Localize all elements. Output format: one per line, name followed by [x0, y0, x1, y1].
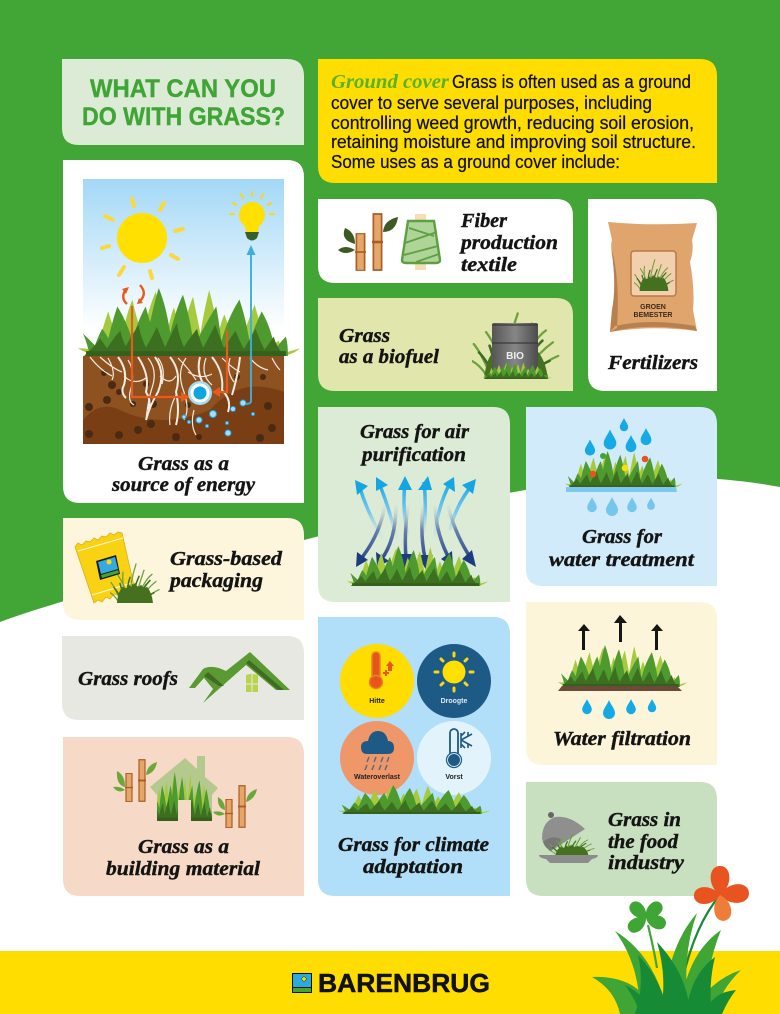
label: Grass: [339, 325, 390, 347]
particles: [590, 453, 648, 477]
icon: drought: [417, 644, 491, 718]
label: [338, 834, 489, 878]
icon: fertilizer bag: [608, 222, 697, 332]
label: building material: [106, 858, 260, 880]
icon: water drops above grass: [585, 418, 651, 456]
grass: [347, 546, 488, 586]
icon: house of grass with bamboo: [113, 756, 257, 828]
panel: title: [62, 59, 304, 145]
panel: grass as a biofuel: [318, 298, 573, 391]
label: Fertilizers: [607, 352, 698, 374]
text block: ground cover: Grass is often used as a ground: [452, 72, 691, 92]
icon: frost: Vorst: [445, 774, 463, 781]
panel: grass for air purification: [318, 407, 510, 602]
label: production: [459, 232, 558, 254]
grass tuft: [110, 564, 159, 603]
panel: grass roofs: [62, 636, 304, 720]
panel: fiber production textile: [318, 199, 573, 283]
icon: bamboo and thread spool: [338, 214, 440, 270]
icon: air arrows: [355, 476, 476, 570]
label: Grass as a: [138, 453, 229, 475]
icon: cloche with grass: [539, 812, 598, 863]
water: blue arrow to bulb: [182, 245, 256, 436]
text block: ground cover: Ground cover: [331, 71, 449, 93]
text block: ground cover: cover to serve several purposes, including: [331, 93, 652, 113]
icon: yellow pouch with grass: [75, 532, 135, 603]
grass: [338, 785, 490, 814]
grass: [78, 288, 300, 356]
label: Grass for air: [360, 421, 469, 443]
label: Grass for: [582, 526, 662, 548]
icon: heat: [340, 644, 414, 718]
icon: flooding: Wateroverlast: [354, 774, 401, 781]
label: source of energy: [111, 474, 255, 496]
label: purification: [360, 444, 466, 466]
plant: flower, clover and grass blades: [592, 866, 750, 1014]
text block: ground cover: [331, 71, 696, 172]
label: [111, 453, 255, 496]
label: [106, 836, 260, 880]
water drops: [582, 699, 656, 719]
filter band: [566, 487, 677, 492]
label: the food: [608, 831, 679, 853]
panel: grass for climate adaptation: [318, 617, 510, 896]
grass: [558, 645, 687, 687]
text block: ground cover: retaining moisture and improving soil structure.: [331, 132, 696, 152]
label: Grass roofs: [78, 668, 178, 690]
icon: light bulb: [230, 192, 274, 240]
label: industry: [608, 852, 684, 874]
sky: [83, 179, 284, 357]
label: water treatment: [549, 549, 696, 571]
label: as a biofuel: [339, 346, 439, 368]
text block: ground cover: controlling weed growth, reducing soil erosion,: [331, 113, 694, 133]
label: [459, 210, 558, 276]
panel: grass for water treatment: [526, 407, 717, 586]
text block: ground cover: Some uses as a ground cover include:: [331, 152, 620, 172]
icon: black arrows up: [578, 615, 663, 650]
icon: heat: Hitte: [369, 698, 385, 705]
icon: fertilizer bag: BEMESTER: [634, 312, 672, 319]
panel: grass as a building material: [63, 737, 304, 896]
label: adaptation: [363, 856, 463, 878]
filtered drops: [587, 497, 655, 516]
label: Water filtration: [553, 728, 691, 750]
icon: bio barrel in grass: [472, 313, 558, 379]
label: [339, 325, 439, 368]
label: [168, 548, 283, 592]
label: Grass as a: [138, 836, 229, 858]
roots: [90, 357, 280, 435]
icon: green roof house: [189, 652, 290, 703]
panel: grass as a source of energy: [63, 160, 304, 503]
label: Fiber: [460, 210, 507, 232]
icon: bio barrel in grass: BIO: [506, 351, 524, 362]
icon: frost: [417, 721, 491, 795]
blades: [592, 977, 655, 1014]
heading: DO WITH GRASS?: [82, 103, 285, 131]
panel: water filtration: [526, 602, 717, 765]
panel: grass in the food industry: [526, 782, 717, 896]
label: Grass in: [608, 809, 681, 831]
footer band: [0, 951, 780, 1014]
grass: [565, 451, 682, 488]
clover: [625, 898, 668, 936]
energy flow: orange arrows: [122, 285, 227, 402]
stems: [683, 895, 720, 978]
soil strip: [558, 686, 682, 691]
label: [549, 526, 696, 571]
panel: ground cover intro: [318, 59, 717, 183]
label: Grass-based: [170, 548, 283, 570]
heading: WHAT CAN YOU: [90, 75, 276, 103]
soil: [83, 356, 284, 444]
icon: fertilizer bag: GROEN: [640, 304, 666, 311]
panel: fertilizers: [588, 199, 717, 391]
panel: grass-based packaging: [63, 518, 304, 620]
logo: Barenbrug: BARENBRUG: [318, 968, 490, 998]
label: packaging: [168, 570, 263, 592]
flower: [694, 866, 750, 922]
label: [360, 421, 469, 466]
icon: sun: [102, 199, 183, 278]
label: [608, 809, 684, 874]
label: textile: [461, 254, 517, 276]
label: Grass for climate: [338, 834, 489, 856]
icon: flooding: [340, 721, 414, 795]
icon: drought: Droogte: [441, 698, 468, 705]
